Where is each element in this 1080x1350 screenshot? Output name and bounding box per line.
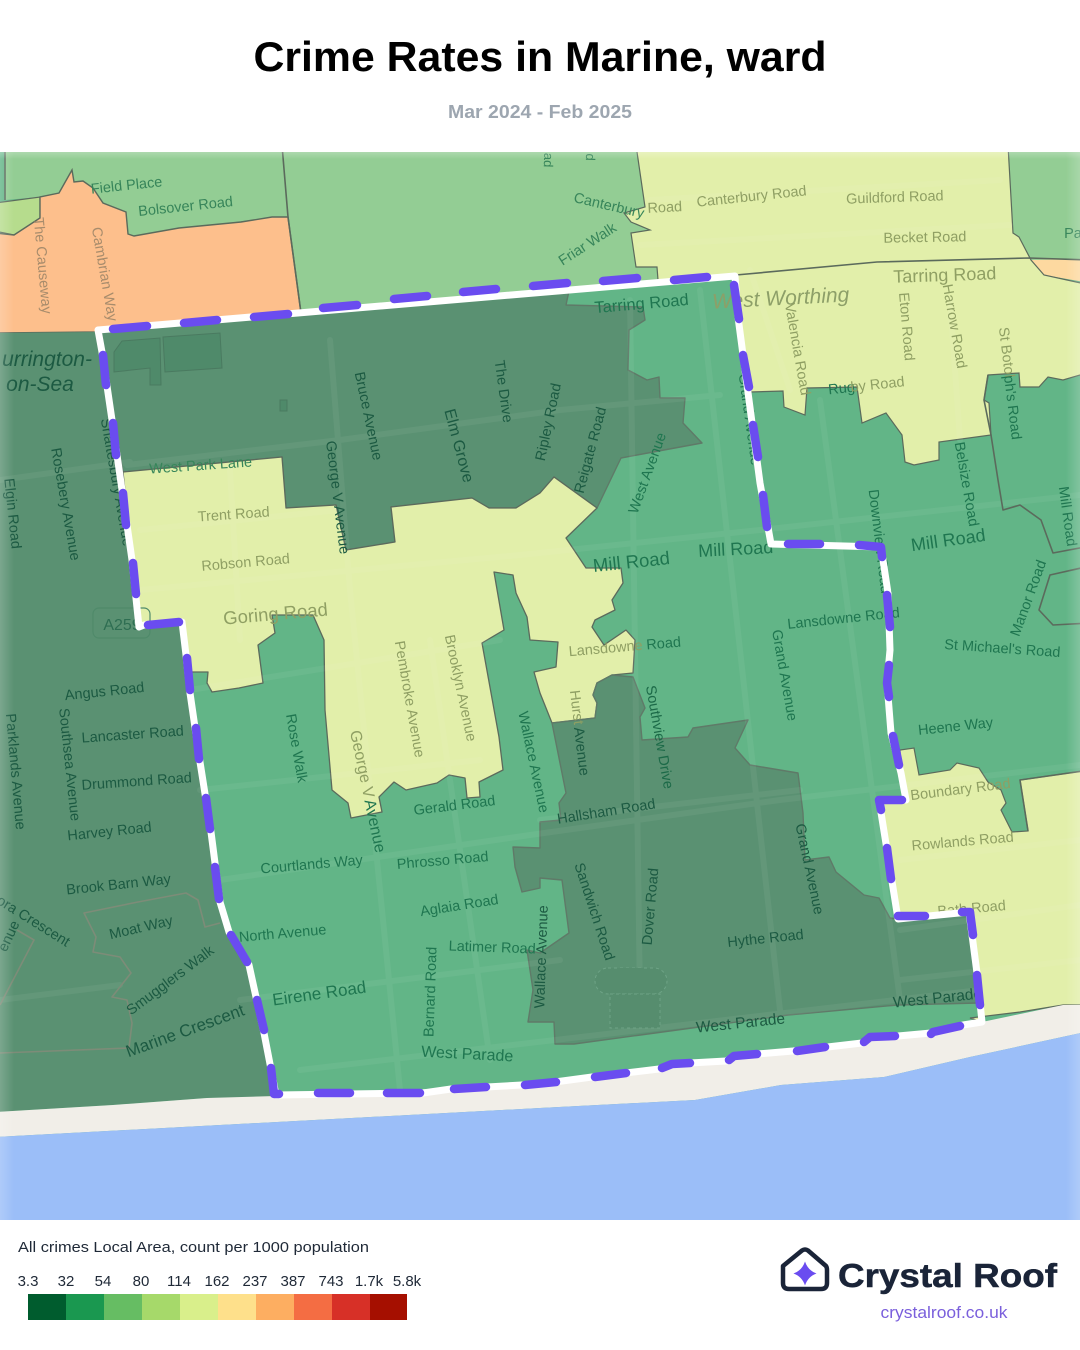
road labels: south-west: Bernard Road — [421, 946, 441, 1037]
road labels: central and east: Boundary Road — [910, 776, 1011, 804]
legend scale labels: 32 — [58, 1273, 74, 1290]
road labels: north-west: Harrow Road — [939, 283, 969, 370]
area: orange north-east — [1031, 259, 1080, 283]
road labels: central and east: Road — [646, 635, 682, 653]
road labels: south-west: Wallace Avenue — [532, 905, 552, 1009]
road labels: central and east: Mill Road — [698, 537, 774, 561]
road labels: north-west: Robson Road — [201, 551, 291, 575]
area: dark green north of ward — [98, 291, 702, 550]
road labels: north-west: ad — [541, 153, 556, 168]
area: yellow north-east — [624, 145, 1080, 465]
road labels: north-west: Rosebery Avenue — [47, 447, 83, 562]
legend scale labels — [18, 1273, 422, 1290]
road labels: north-west: Tarring Road — [893, 263, 997, 287]
road labels: south-east: Grand Avenue — [791, 822, 826, 916]
logo icon: house with star — [783, 1250, 827, 1289]
road labels: north-west: urrington- — [2, 348, 92, 371]
road labels: south-east — [556, 796, 983, 1037]
road labels: south-west: Moat Way — [108, 913, 175, 943]
panel: choropleth map — [0, 145, 1080, 1225]
ward boundary: white casing — [98, 276, 982, 1095]
title: Crime Rates in Marine, ward — [254, 33, 826, 80]
road labels: central and east: Heene Way — [917, 715, 995, 739]
road labels: north-west: Shaftesbury Avenue — [97, 417, 135, 547]
road labels: south-west: Smugglers Walk — [124, 942, 218, 1019]
road labels: south-west: North Avenue — [238, 922, 327, 946]
road labels: south-west: Courtlands Way — [260, 853, 364, 877]
road labels: north-west: Eton Road — [895, 292, 917, 361]
street network — [7, 224, 1012, 1042]
legend scale labels: 54 — [95, 1273, 111, 1290]
area outlines — [0, 145, 1080, 1053]
road labels: central and east — [282, 441, 1079, 920]
road labels: central and east: Lansdowne Road — [787, 605, 901, 633]
school buildings — [114, 333, 287, 411]
road labels: north-west: ph's Road — [1000, 374, 1024, 441]
logo wordmark: Crystal Roof — [838, 1257, 1058, 1294]
road labels: central and east: Belsize Road — [951, 441, 981, 528]
road labels: central and east: Pembroke Avenue — [391, 640, 427, 759]
road labels: south-east: Dover Road — [640, 867, 662, 946]
road labels: south-west: Brook Barn Way — [66, 871, 172, 898]
road labels: south-west: Angus Road — [64, 680, 145, 704]
road labels: south-west: Eirene Road — [271, 978, 367, 1010]
road labels: south-east: Hythe Road — [727, 927, 804, 951]
road labels: south-west: Harvey Road — [67, 820, 152, 844]
road labels: north-west: Cambrian Way — [88, 226, 120, 323]
area: pale green sliver — [0, 197, 40, 235]
area: light green north — [5, 145, 658, 313]
area: yellow south-east — [879, 748, 1080, 1022]
road labels: central and east: Rowlands Road — [911, 830, 1014, 854]
road labels: north-west: Road — [647, 199, 683, 217]
road labels: north-west: Reigate Road — [572, 405, 610, 495]
road labels: central and east: Rose Walk — [282, 713, 310, 785]
road sign: A259 — [93, 608, 150, 638]
road labels: north-west: Elgin Road — [0, 477, 24, 550]
road labels: central and east: Mill Road — [910, 525, 987, 555]
road labels: central and east: Avenue — [360, 798, 388, 854]
road labels: north-west: The Causeway — [30, 217, 54, 315]
road labels: central and east: Hurst — [566, 689, 586, 726]
road labels: north-west: Friar Walk — [556, 220, 620, 269]
road labels: north-west: Goring Road — [222, 598, 329, 629]
road labels: north-west: Field Place — [90, 174, 163, 198]
road labels: central and east: Mill Road — [592, 547, 671, 576]
road labels: north-west: Ripley Road — [533, 382, 565, 463]
road labels: north-west — [0, 153, 1080, 629]
road labels: south-west: Drummond Road — [81, 770, 192, 794]
area: dark green west — [0, 332, 276, 1112]
road labels: south-east: Sandwich Road — [571, 861, 617, 963]
road labels: north-west: St Botol — [995, 326, 1017, 379]
road labels: central and east: Grand Avenue — [768, 628, 800, 722]
road sign: A259: A259 — [103, 617, 141, 634]
road labels: north-west: Trent Road — [197, 505, 270, 526]
legend scale labels: 237 — [242, 1273, 268, 1290]
road labels: central and east: Brooklyn Avenue — [441, 633, 479, 743]
road labels: south-west: Gerald Road — [413, 793, 496, 819]
road labels: central and east: Southview Drive — [642, 684, 676, 790]
road labels: central and east: Downview Road — [865, 489, 893, 594]
road labels: north-west: Guildford Road — [846, 188, 944, 208]
beach — [0, 1005, 1080, 1137]
road labels: central and east: Manor Road — [1008, 558, 1050, 639]
road labels: north-west: d — [583, 153, 598, 161]
area: light green north-east corner — [1008, 145, 1080, 260]
road labels: south-east: Hallsham Road — [556, 796, 657, 828]
road labels: north-west: Bruce Avenue — [351, 370, 385, 462]
road labels: south-east: West Parade — [892, 985, 983, 1012]
road labels: central and east: George V — [346, 729, 377, 800]
road labels: south-west: Aglaia Road — [419, 892, 500, 920]
road labels: south-west: West Parade — [421, 1044, 514, 1065]
road labels: south-west — [0, 680, 552, 1065]
road labels: central and east: Lansdowne — [568, 638, 643, 660]
legend scale labels: 80 — [133, 1273, 149, 1290]
road labels: north-west: West Park Lane — [149, 454, 253, 478]
road labels: north-west: Becket Road — [883, 229, 967, 247]
legend scale labels: 162 — [204, 1273, 230, 1290]
road labels: central and east: Wallace Avenue — [514, 710, 551, 814]
legend scale labels: 1.7k — [355, 1273, 384, 1290]
subtitle: date range: Mar 2024 - Feb 2025 — [448, 101, 632, 122]
legend scale labels: 743 — [318, 1273, 344, 1290]
road labels: north-west: Valencia Road — [781, 302, 813, 397]
road labels: north-west: Bolsover Road — [137, 194, 234, 220]
legend scale labels: 3.3 — [18, 1273, 38, 1290]
road labels: north-west: by Road — [850, 374, 905, 396]
ward boundary: purple dashes — [103, 277, 980, 1094]
area: orange high crime — [0, 170, 301, 333]
road labels: north-west: Grand Avenue — [735, 373, 763, 466]
road labels: south-west: Southsea Avenue — [55, 707, 83, 822]
road labels: central and east: Bath Road — [937, 898, 1006, 920]
gardens: dashed park near West Parade — [595, 968, 667, 1028]
legend scale labels: 114 — [167, 1273, 191, 1290]
road labels: north-west: Canterbury Road — [696, 183, 807, 211]
road labels: north-west: Canterbury — [572, 190, 646, 222]
road labels: central and east: St Michael's Road — [944, 637, 1061, 661]
website: crystalroof.co.uk — [880, 1304, 1008, 1322]
road labels: central and east: Avenue — [570, 726, 592, 777]
edge fade — [0, 152, 1080, 1220]
road labels: south-west: Latimer Road — [448, 938, 536, 958]
sea — [0, 1031, 1080, 1225]
legend scale labels: 5.8k — [393, 1273, 422, 1290]
road labels: central and east: Mill Road — [1055, 485, 1079, 547]
road labels: north-west: Tarring Road — [594, 291, 689, 317]
road labels: north-west: Elm Grove — [440, 407, 476, 485]
road labels: south-west: Phrosso Road — [396, 849, 489, 873]
legend colour bar — [28, 1294, 407, 1320]
road labels: south-west: Lancaster Road — [81, 723, 184, 747]
road labels: south-west: Marine Crescent — [123, 1000, 247, 1061]
road labels: north-west: George V Avenue — [322, 440, 352, 555]
legend scale labels: 387 — [280, 1273, 306, 1290]
road labels: north-west: West Avenue — [626, 431, 670, 516]
area: yellow central — [123, 457, 635, 818]
road labels: north-west: The Drive — [491, 359, 515, 424]
road labels: north-west: West Worthing — [711, 283, 850, 314]
road labels: north-west: on-Sea — [6, 373, 74, 396]
road labels: south-east: West Parade — [695, 1010, 786, 1037]
road labels: north-west: Rug — [828, 380, 856, 398]
area: dark green south of ward — [513, 675, 978, 1044]
road labels: south-west: Parklands Avenue — [2, 713, 28, 830]
legend title: All crimes Local Area, count per 1000 population — [18, 1239, 369, 1256]
